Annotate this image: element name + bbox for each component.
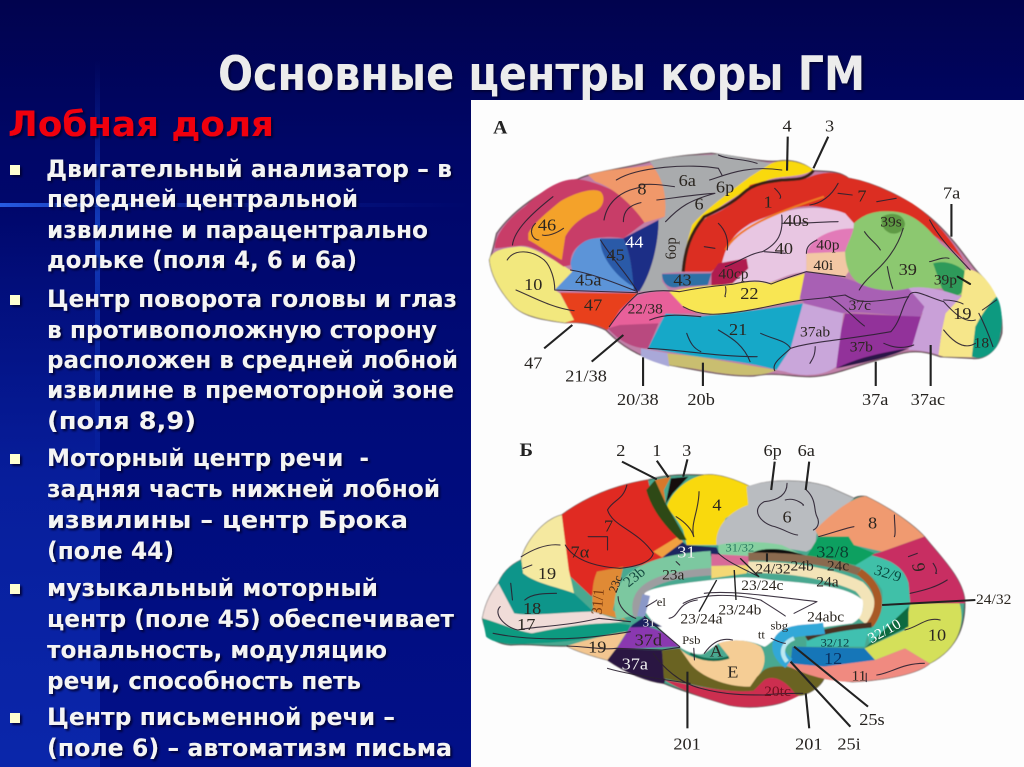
- brain Б labels: Psb: [682, 633, 700, 647]
- bullet 4: musical motor centre: тональность, модуляцию: [47, 636, 387, 664]
- brain A labels: 1: [763, 192, 773, 211]
- brain A labels: 21/38: [565, 366, 607, 386]
- brain Б labels: 32/9: [872, 563, 903, 586]
- brain A labels: 40р: [816, 238, 839, 253]
- bullet 2: head and eye turning centre: (поля 8,9): [47, 407, 196, 435]
- brain Б labels: tt: [758, 628, 765, 641]
- brain Б labels: 31: [643, 616, 655, 630]
- brain A labels: 40: [775, 238, 793, 258]
- diagram Б: medial surface of the brain: [483, 439, 1011, 753]
- brain Б labels: 6р: [763, 440, 782, 460]
- brain A labels: 45а: [575, 270, 602, 290]
- bullet 1: motor analyzer: извилине и парацентрально: [47, 216, 428, 244]
- brain Б labels: 201: [795, 734, 823, 753]
- brain Б labels: 24b: [791, 559, 814, 575]
- brain Б labels: 32/12: [820, 636, 849, 650]
- bullet 3: motor speech centre: [10, 444, 440, 565]
- brain Б labels: 31/32: [725, 541, 754, 555]
- brain A labels: 47: [584, 295, 602, 315]
- brain A colour regions: [490, 153, 1002, 377]
- brain Б sulci: [493, 483, 947, 695]
- brain Б labels: 23b: [621, 565, 649, 591]
- brain A labels: 19: [953, 303, 972, 323]
- brain A labels: 37а: [862, 389, 889, 409]
- bullet 5: written speech centre: Центр письменной речи –: [47, 703, 395, 731]
- brain A labels: 37аb: [800, 325, 830, 341]
- bullet 2: head and eye turning centre: извилине в премоторной зоне: [47, 376, 454, 404]
- brain A labels: 45: [606, 245, 625, 265]
- brain A labels: 40i: [813, 258, 833, 274]
- brain A labels: 6ор: [664, 237, 680, 259]
- heading: Лобная доля: Лобная доля: [8, 105, 274, 145]
- brain A labels: [493, 116, 989, 409]
- bullet 3: motor speech centre: извилины – центр Брока: [47, 506, 408, 534]
- brain Б labels: 19: [538, 563, 556, 583]
- brain Б labels: 31: [677, 542, 696, 561]
- brain Б labels: 6: [782, 507, 792, 526]
- bullet 4: musical motor centre: [10, 574, 454, 695]
- brain Б labels: 37d: [635, 630, 662, 649]
- brain Б labels: 24abc: [807, 610, 844, 625]
- brain A labels: 39s: [880, 215, 902, 231]
- brain A labels: 22/38: [628, 302, 663, 317]
- bullet 1: motor analyzer: дольке (поля 4, 6 и 6а): [47, 246, 357, 274]
- brain Б labels: 6а: [798, 440, 815, 460]
- bullet 1: motor analyzer: Двигательный анализатор – в: [46, 155, 452, 183]
- brain A labels: 6: [694, 194, 704, 213]
- brain Б labels: 23/24b: [718, 603, 761, 618]
- brain Б labels: el: [657, 595, 667, 609]
- brain Б labels: 19: [588, 637, 607, 657]
- brain A sulci: [507, 155, 996, 371]
- brain Б labels: 24/32: [976, 592, 1011, 608]
- brain Б colour regions: [483, 475, 965, 707]
- brain A labels: 40s: [784, 210, 809, 230]
- brain Б labels: 18: [523, 598, 541, 618]
- brain A labels: 3: [825, 116, 834, 136]
- brain A labels: 37b: [850, 340, 873, 356]
- brain A labels: А: [493, 118, 507, 138]
- text block: bullet list: [10, 155, 458, 762]
- brain Б labels: 9: [908, 561, 930, 573]
- brain Б labels: 23/24с: [741, 578, 784, 594]
- brain A labels: 18: [974, 336, 989, 351]
- brain A labels: 47: [524, 353, 542, 372]
- panel: brain diagrams: [471, 100, 1024, 767]
- brain A labels: 37ас: [911, 389, 945, 409]
- diagram A: lateral surface of the brain: [490, 116, 1002, 409]
- brain A labels: 8: [637, 179, 647, 198]
- brain Б labels: 25i: [837, 734, 861, 753]
- brain Б labels: 32/10: [865, 617, 904, 647]
- brain Б labels: Е: [727, 662, 738, 681]
- brain A labels: 20b: [687, 389, 715, 409]
- brain A labels: 10: [524, 274, 542, 294]
- brain Б labels: А: [710, 641, 723, 661]
- bullet 2: head and eye turning centre: в противоположную сторону: [47, 316, 437, 344]
- title: Основные центры коры ГМ: [218, 47, 865, 102]
- brain Б labels: 201: [673, 734, 701, 753]
- brain Б labels: 11: [851, 669, 866, 685]
- brain A labels: 7а: [943, 183, 960, 202]
- bullet 2: head and eye turning centre: Центр поворота головы и глаз: [47, 285, 457, 313]
- brain A labels: 22: [740, 283, 759, 303]
- brain A leader lines: [544, 137, 951, 386]
- brain A labels: 39: [899, 259, 917, 279]
- bullet 4: musical motor centre: музыкальный моторный: [47, 574, 378, 602]
- brain Б labels: 24с: [827, 559, 849, 575]
- brain Б labels: 7: [604, 516, 613, 536]
- brain Б labels: 3: [682, 440, 691, 460]
- brain Б labels: 4: [712, 495, 722, 515]
- brain Б labels: 24/32: [755, 562, 791, 577]
- brain A labels: 46: [538, 215, 556, 235]
- brain A labels: 43: [673, 270, 692, 290]
- brain Б labels: 17: [517, 614, 535, 634]
- brain Б labels: sbg: [770, 619, 788, 632]
- bullet 3: motor speech centre: задняя часть нижней лобной: [47, 475, 440, 503]
- brain Б labels: 1: [652, 440, 661, 460]
- brain Б labels: 23/24а: [680, 612, 723, 627]
- brain Б labels: 32/8: [816, 542, 849, 561]
- brain A labels: 40ср: [718, 267, 748, 282]
- bullet 3: motor speech centre: (поле 44): [47, 537, 174, 565]
- bullet 5: written speech centre: [10, 703, 452, 762]
- bullet 3: motor speech centre: Моторный центр речи -: [47, 444, 369, 472]
- brain Б labels: Б: [520, 439, 533, 461]
- bullet 1: motor analyzer: [10, 155, 452, 274]
- brain A labels: 37с: [849, 298, 871, 314]
- brain A labels: 39р: [934, 273, 957, 288]
- brain Б labels: 31/1: [589, 588, 608, 615]
- brain Б labels: 37а: [622, 654, 648, 673]
- bullet 2: head and eye turning centre: расположен в средней лобной: [47, 346, 458, 374]
- brain Б labels: 25s: [859, 709, 885, 729]
- brain A labels: 21: [729, 319, 747, 339]
- bullet 1: motor analyzer: передней центральной: [47, 185, 358, 213]
- bullet 5: written speech centre: (поле 6) – автоматизм письма: [47, 734, 452, 762]
- brain A labels: 6р: [716, 177, 734, 197]
- brain A labels: 4: [782, 116, 792, 136]
- brain Б labels: 23а: [662, 568, 685, 583]
- brain Б labels: 24а: [816, 575, 839, 591]
- bullet 2: head and eye turning centre: [10, 285, 458, 435]
- brain Б labels: 23с: [606, 573, 626, 594]
- brain A labels: 20/38: [617, 389, 659, 409]
- brain Б labels: 10: [928, 625, 946, 645]
- brain Б labels: 20tc: [764, 684, 791, 700]
- bullet 4: musical motor centre: речи, способность петь: [47, 667, 361, 695]
- brain Б labels: 2: [616, 440, 625, 460]
- brain Б leader lines: [622, 459, 975, 728]
- brain A labels: 44: [625, 232, 644, 251]
- brain A labels: 6а: [679, 170, 696, 190]
- brain Б labels: 8: [868, 513, 877, 532]
- brain Б labels: 7α: [571, 542, 589, 561]
- bullet 4: musical motor centre: центр (поле 45) обеспечивает: [47, 605, 454, 633]
- brain Б labels: [517, 439, 1011, 753]
- brain A labels: 7: [857, 186, 867, 206]
- brain Б labels: 12: [824, 648, 842, 668]
